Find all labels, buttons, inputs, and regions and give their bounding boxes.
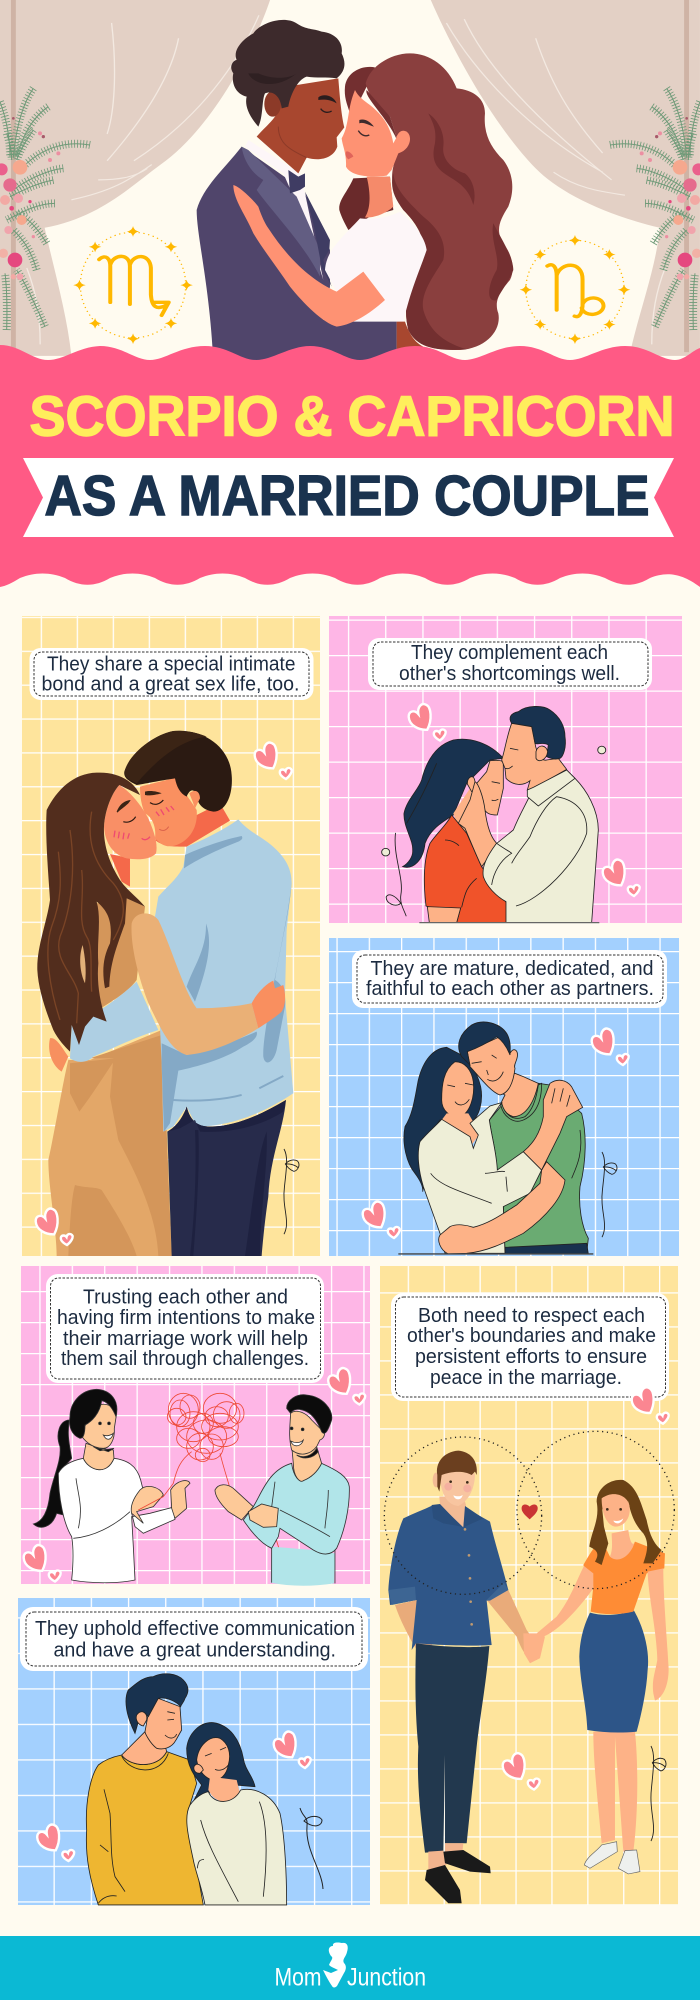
callout text: bond and a great sex life, too. [42, 674, 300, 696]
callout text: having firm intentions to make [57, 1307, 315, 1329]
hearts [34, 1208, 73, 1245]
callout text: other's shortcomings well. [399, 663, 620, 685]
couple illustration 6 [384, 1431, 674, 1903]
logo icon [323, 1942, 348, 1988]
callout text: their marriage work will help [63, 1328, 308, 1350]
hearts [22, 1544, 61, 1582]
panel: trust [21, 1266, 370, 1586]
red scribble heart [138, 1393, 281, 1554]
header illustration [0, 0, 700, 363]
curtains [0, 0, 700, 356]
ribbon banner [23, 458, 674, 537]
title line 2: AS A MARRIED COUPLE [44, 464, 650, 528]
callout text: They complement each [411, 642, 608, 664]
hearts [326, 1367, 365, 1404]
hearts [630, 1386, 669, 1424]
panel: complement shortcomings [329, 616, 682, 923]
hearts [253, 742, 292, 779]
couple illustration [197, 20, 513, 363]
hearts [501, 1752, 540, 1790]
couple illustration 2 [403, 706, 599, 923]
footer bar [0, 1936, 700, 2000]
zodiac sign: Scorpio [73, 226, 193, 344]
callout text: them sail through challenges. [61, 1348, 309, 1370]
title line 1: SCORPIO & CAPRICORN [30, 384, 674, 448]
callout [368, 638, 652, 690]
hearts [601, 859, 640, 896]
pink title band [0, 345, 700, 587]
callout [352, 950, 667, 1008]
zodiac sign: Capricorn [520, 235, 630, 344]
flower sprig left [0, 88, 90, 330]
doodle flower [651, 1746, 666, 1841]
hearts [272, 1731, 311, 1768]
dotted circles [384, 1431, 674, 1594]
doodle flower [602, 1152, 617, 1237]
couple illustration 5 [86, 1674, 287, 1905]
doodle flower [300, 1808, 323, 1889]
callout [391, 1293, 669, 1401]
flower sprig right [610, 88, 700, 330]
panel: mature and faithful [329, 938, 679, 1256]
logo text: Junction [347, 1964, 426, 1992]
callout text: faithful to each other as partners. [366, 978, 654, 1000]
callout text: peace in the marriage. [430, 1367, 622, 1389]
callout [20, 1607, 368, 1671]
callout text: Trusting each other and [83, 1286, 288, 1308]
hearts [361, 1201, 400, 1238]
couple illustration 3 [398, 1022, 593, 1254]
logo text: Mom [274, 1964, 322, 1992]
doodle flower [284, 1149, 299, 1234]
callout text: other's boundaries and make [407, 1325, 656, 1347]
doodle flower [382, 746, 606, 916]
couple illustration 1 [37, 731, 293, 1256]
callout text: persistent efforts to ensure [415, 1346, 647, 1368]
hearts [590, 1028, 629, 1065]
callout text: Both need to respect each [418, 1305, 645, 1327]
callout text: They share a special intimate [47, 654, 296, 676]
callout text: They uphold effective communication [35, 1618, 355, 1640]
hearts [35, 1824, 74, 1861]
panel: respect boundaries [380, 1266, 678, 1905]
callout [46, 1274, 324, 1383]
panel: intimate bond [22, 616, 320, 1256]
callout [30, 648, 314, 700]
callout text: They are mature, dedicated, and [370, 958, 654, 980]
hearts [407, 703, 446, 740]
callout text: and have a great understanding. [54, 1640, 336, 1662]
panel: communication [18, 1598, 370, 1905]
couple illustration 4 [33, 1389, 349, 1586]
